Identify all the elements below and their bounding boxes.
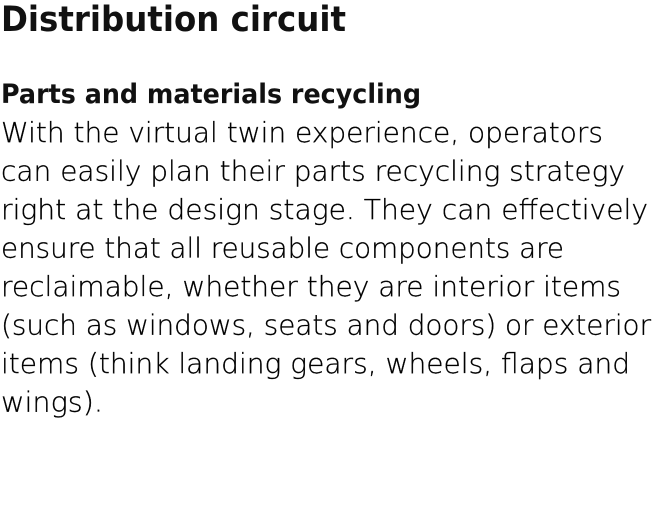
body text (1, 116, 651, 418)
body text: items (think landing gears, wheels, flaps and (1, 347, 630, 380)
body text: right at the design stage. They can effectively (1, 193, 648, 226)
body text: can easily plan their parts recycling strategy (1, 154, 625, 188)
body text: wings). (1, 386, 103, 418)
body text: ensure that all reusable components are (1, 232, 564, 264)
subheading: Parts and materials recycling (1, 79, 421, 110)
body text: (such as windows, seats and doors) or exterior (1, 308, 651, 342)
body text: With the virtual twin experience, operators (1, 116, 603, 149)
title: Distribution circuit (1, 0, 346, 40)
body text: reclaimable, whether they are interior items (1, 270, 621, 303)
